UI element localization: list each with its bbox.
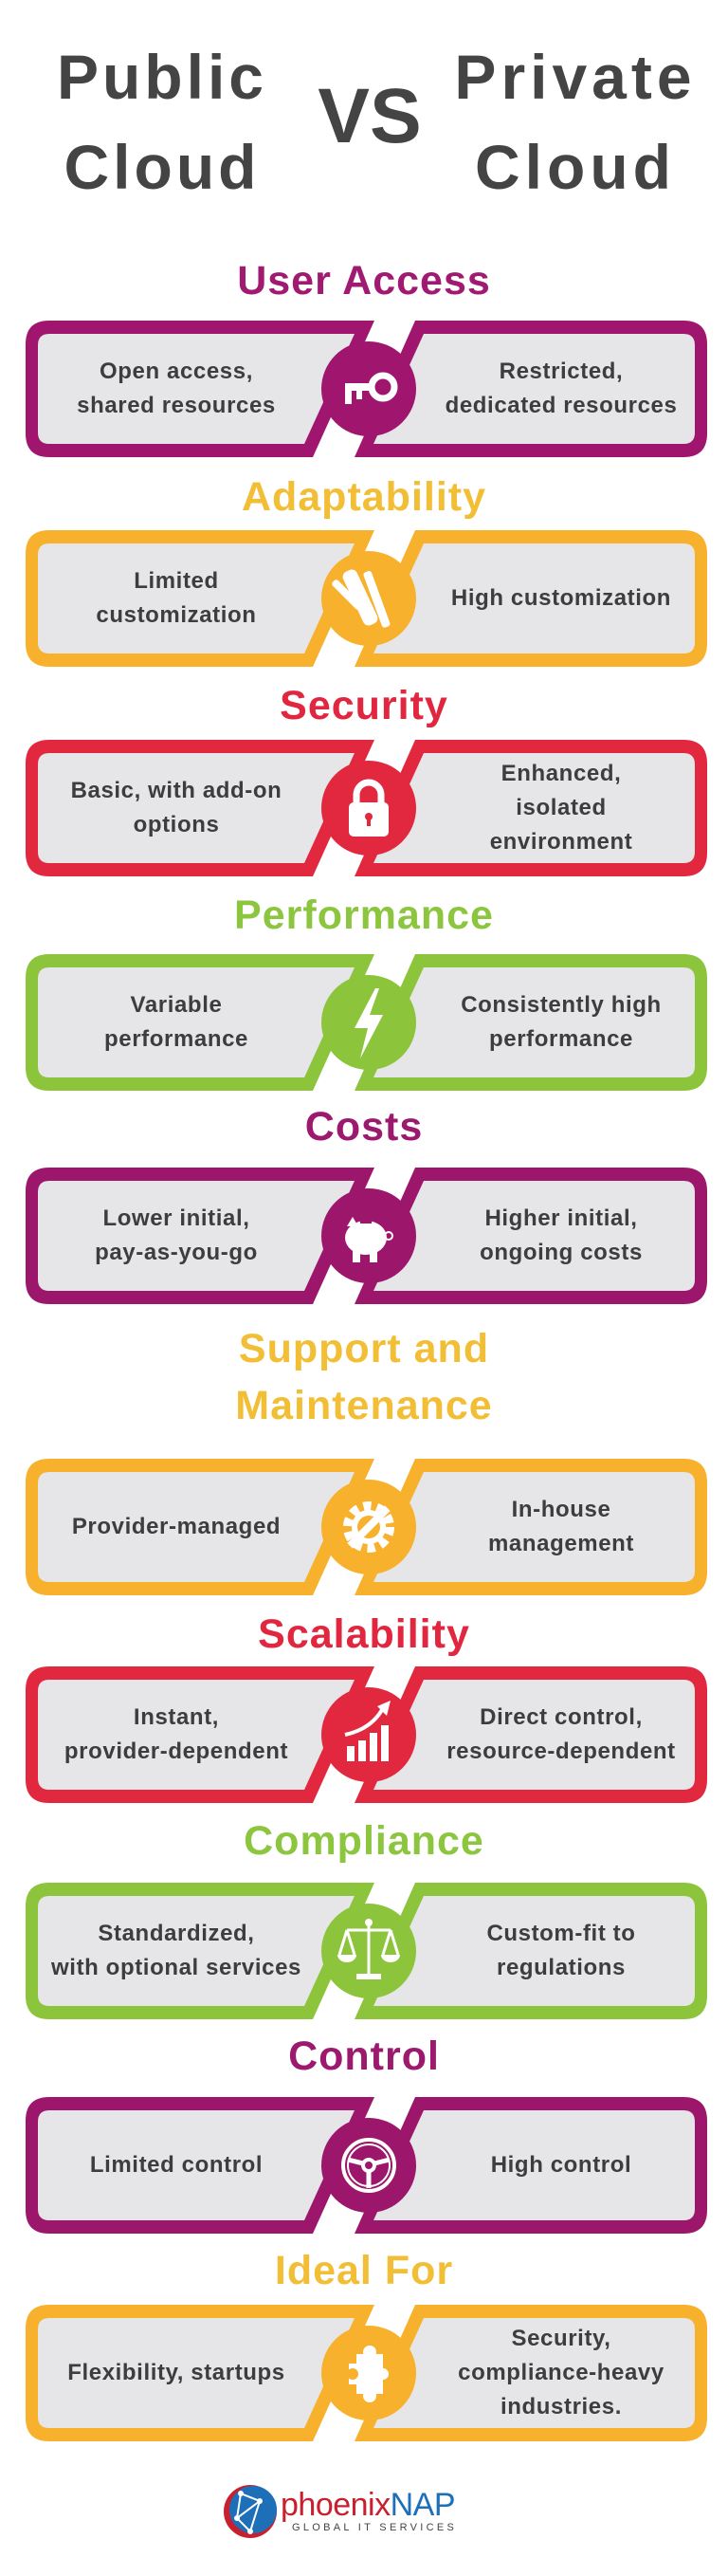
icon: puzzle piece: [349, 2346, 389, 2402]
panel: ideal for: Flexibility, startups: [67, 2360, 285, 2385]
panel: ideal for: compliance-heavy: [458, 2360, 664, 2385]
panel: compliance: with optional services: [51, 1955, 301, 1980]
panel: security: isolated: [516, 795, 607, 820]
panel: performance: Consistently high: [461, 992, 662, 1018]
panel: control: [26, 2097, 707, 2234]
panel: scalability: resource-dependent: [446, 1739, 676, 1764]
icon: scales: [339, 1923, 398, 1976]
icon: lock: [349, 782, 389, 837]
panel: performance: performance: [104, 1026, 248, 1052]
panel: compliance: Standardized,: [98, 1921, 255, 1946]
heading: Costs: Costs: [305, 1104, 423, 1150]
title: [57, 42, 697, 202]
panel: scalability: provider-dependent: [64, 1739, 288, 1764]
panel: support: [26, 1459, 707, 1595]
panel: security: environment: [490, 829, 632, 855]
panel: compliance: regulations: [497, 1955, 626, 1980]
title: private cloud: [454, 42, 697, 202]
panel: security: options: [134, 812, 219, 837]
logo: phoenixNAP: GLOBAL IT SERVICES: [292, 2522, 457, 2533]
icon: globe: [224, 2485, 277, 2538]
panel: support: management: [488, 1531, 634, 1556]
panel: performance: [26, 954, 707, 1091]
panel: ideal for: [26, 2305, 707, 2441]
panel: compliance: Custom-fit to: [486, 1921, 636, 1946]
panel: costs: Higher initial,: [484, 1205, 637, 1231]
icon: swiss knife: [331, 568, 391, 628]
panel: costs: pay-as-you-go: [95, 1240, 258, 1265]
icon: growth chart: [345, 1701, 391, 1761]
heading: Compliance: Compliance: [244, 1818, 484, 1864]
panel: costs: Lower initial,: [102, 1205, 250, 1231]
heading: Support and Maintenance: [235, 1326, 493, 1428]
title: private cloud: Private: [454, 42, 697, 112]
panel: control: High control: [491, 2152, 631, 2178]
panel: support: Provider-managed: [72, 1514, 281, 1539]
panel: user access: Open access,: [100, 359, 253, 384]
title: private cloud: Cloud: [475, 132, 676, 202]
panel: scalability: Instant,: [134, 1704, 219, 1730]
title: public cloud: Public: [57, 42, 267, 112]
panel: security: Basic, with add-on: [71, 778, 282, 803]
panel: costs: ongoing costs: [480, 1240, 643, 1265]
panel: compliance: [26, 1883, 707, 2019]
logo text: phoenixNAP: [281, 2487, 455, 2523]
logo: phoenixNAP: [224, 2485, 457, 2538]
panel: security: Enhanced,: [501, 761, 621, 786]
panel: adaptability: [26, 530, 707, 667]
panel: performance: Variable: [131, 992, 222, 1018]
icon: key: [372, 376, 394, 398]
heading: Scalability: Scalability: [258, 1611, 470, 1657]
panel: user access: Restricted,: [500, 359, 623, 384]
panel: security: [26, 740, 707, 876]
title: vs: VS: [318, 73, 422, 159]
icon: steering wheel: [343, 2140, 394, 2191]
panel: ideal for: Security,: [511, 2326, 610, 2351]
heading: Security: Security: [280, 683, 448, 728]
panel: user access: [26, 321, 707, 457]
heading: Ideal For: Ideal For: [275, 2248, 453, 2293]
heading: Performance: Performance: [234, 892, 494, 938]
panel: user access: shared resources: [77, 393, 276, 418]
icon: gear and wrench: [347, 1505, 391, 1549]
icon: piggy bank: [345, 1217, 392, 1262]
heading: User Access: User Access: [237, 258, 491, 304]
panel: scalability: [26, 1666, 707, 1803]
panel: costs: [26, 1168, 707, 1304]
title: public cloud: [57, 42, 267, 202]
panel: adaptability: Limited: [134, 568, 219, 594]
heading: Adaptability: Adaptability: [242, 474, 486, 520]
panel: adaptability: High customization: [451, 585, 671, 611]
panel: performance: performance: [489, 1026, 633, 1052]
heading: Control: Control: [288, 2033, 440, 2079]
panel: support: In-house: [512, 1497, 610, 1522]
title: public cloud: Cloud: [64, 132, 260, 202]
panel: user access: dedicated resources: [446, 393, 677, 418]
panel: ideal for: industries.: [500, 2394, 622, 2420]
icon: lightning bolt: [355, 988, 383, 1058]
panel: scalability: Direct control,: [480, 1704, 643, 1730]
heading: Support and Maintenance: Support and: [239, 1326, 489, 1371]
panel: adaptability: customization: [96, 602, 257, 628]
heading: Support and Maintenance: Maintenance: [235, 1383, 493, 1428]
panel: control: Limited control: [90, 2152, 263, 2178]
